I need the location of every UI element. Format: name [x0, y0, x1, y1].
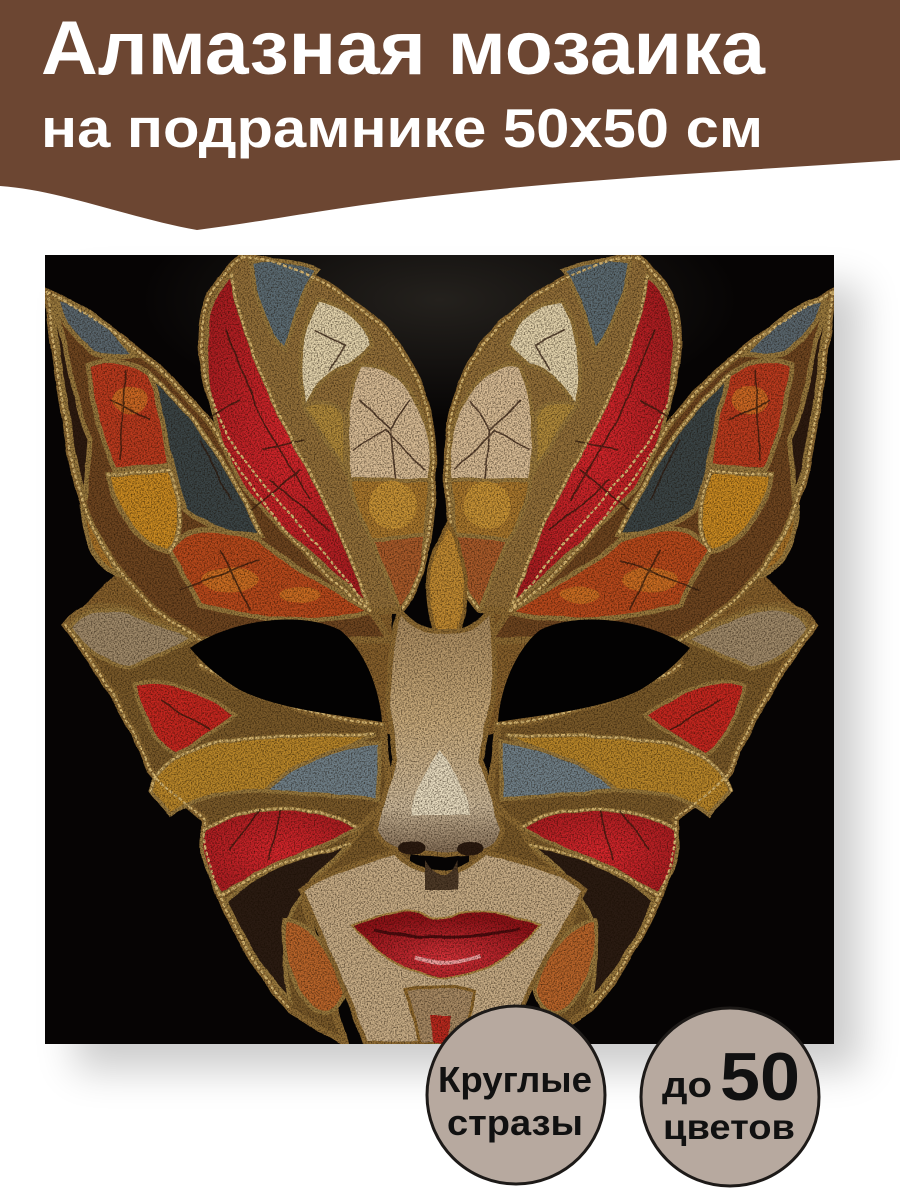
canvas with mask artwork: [45, 180, 834, 1044]
chin: [405, 986, 475, 1044]
face: [300, 852, 585, 1044]
header banner: [0, 0, 900, 230]
badge: up to 50 colours: до: [662, 1064, 712, 1105]
nostrils: [397, 841, 484, 890]
title: Алмазная мозаика: [41, 6, 766, 91]
badge: up to 50 colours: 50: [720, 1039, 800, 1115]
canvas shadow: [75, 285, 860, 1070]
nose: [375, 610, 502, 855]
badge: round rhinestones: стразы: [447, 1102, 583, 1143]
lips: [352, 911, 540, 978]
eye holes: [190, 620, 690, 722]
badge: up to 50 colours: [641, 1008, 819, 1186]
badge: up to 50 colours: цветов: [663, 1108, 795, 1147]
subtitle: на подрамнике 50х50 см: [41, 97, 763, 159]
badge: round rhinestones: Круглые: [438, 1059, 592, 1100]
mask: [48, 257, 832, 1044]
forehead drop: [428, 525, 466, 650]
badge: round rhinestones: [427, 1006, 605, 1184]
nose highlight: [412, 750, 470, 815]
